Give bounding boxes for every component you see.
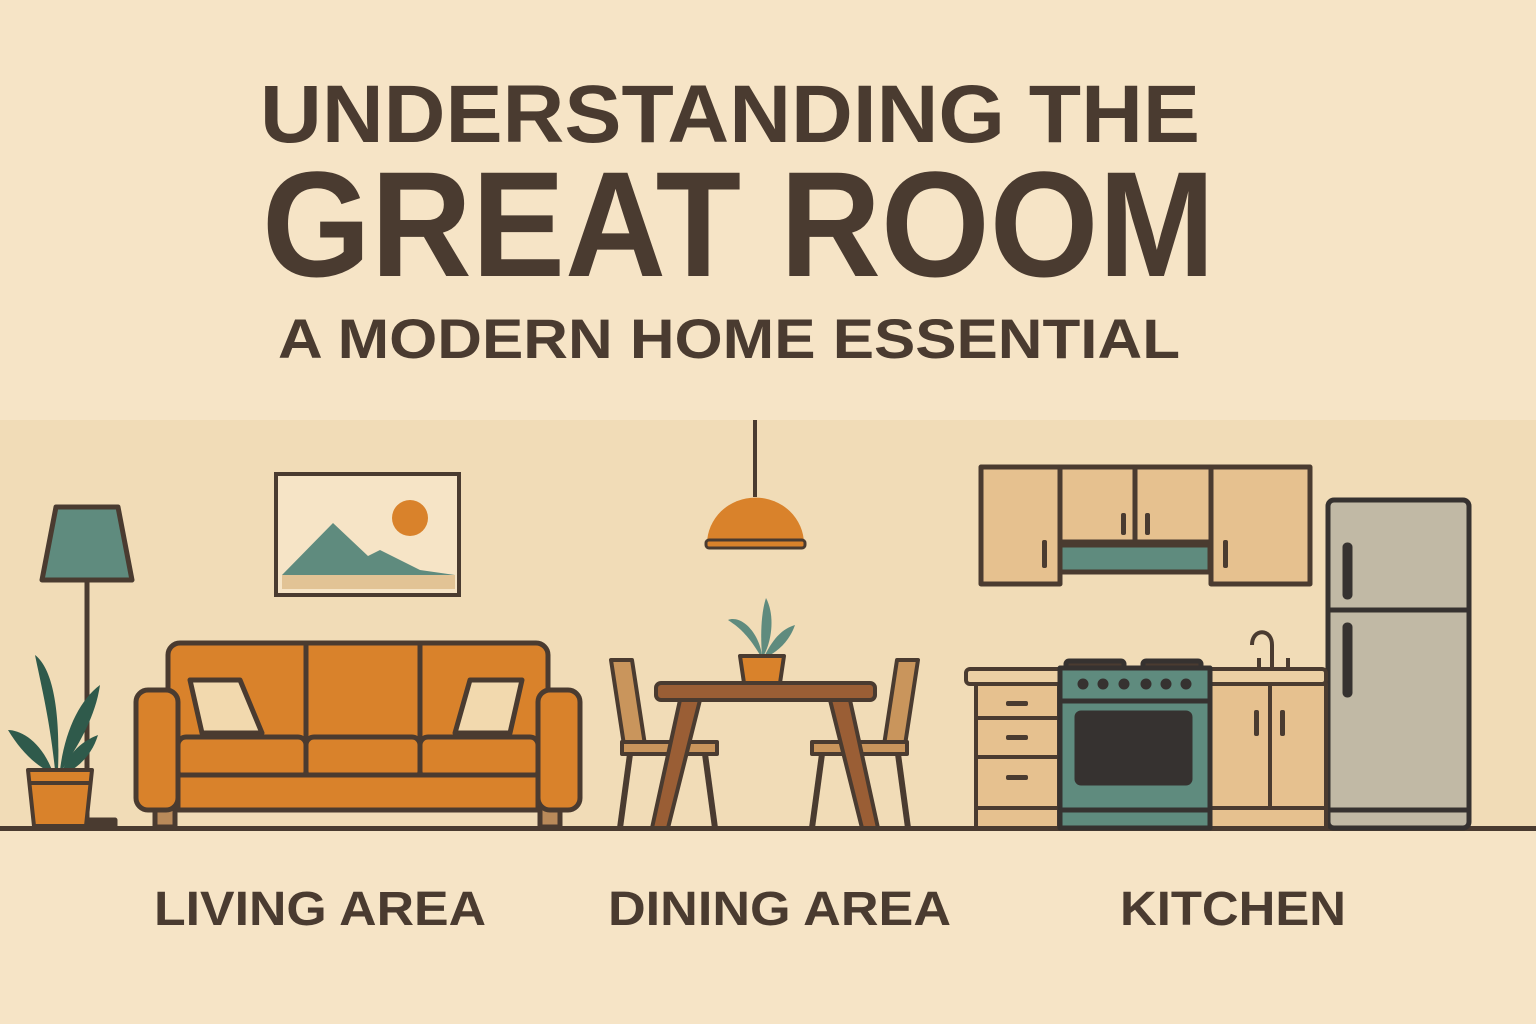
icon: stove — [1060, 661, 1210, 828]
icon: sofa — [136, 643, 580, 827]
icon: wall picture — [276, 474, 459, 595]
icon: refrigerator — [1328, 500, 1469, 828]
icon: dining table with chairs — [611, 598, 918, 828]
label: kitchen: KITCHEN — [1120, 883, 1346, 936]
icon: upper cabinets — [981, 467, 1310, 584]
floor line — [0, 826, 1536, 831]
icon: pendant lamp — [706, 420, 805, 548]
title: UNDERSTANDING THE — [260, 69, 1200, 160]
title: GREAT ROOM — [262, 140, 1215, 308]
label: dining area: DINING AREA — [608, 883, 951, 936]
subtitle: A MODERN HOME ESSENTIAL — [278, 307, 1180, 370]
icon: floor lamp — [42, 507, 132, 826]
title — [260, 69, 1215, 308]
icon: counter and base cabinets — [966, 632, 1326, 828]
icon: potted plant — [8, 655, 100, 826]
label: living area: LIVING AREA — [154, 883, 486, 936]
